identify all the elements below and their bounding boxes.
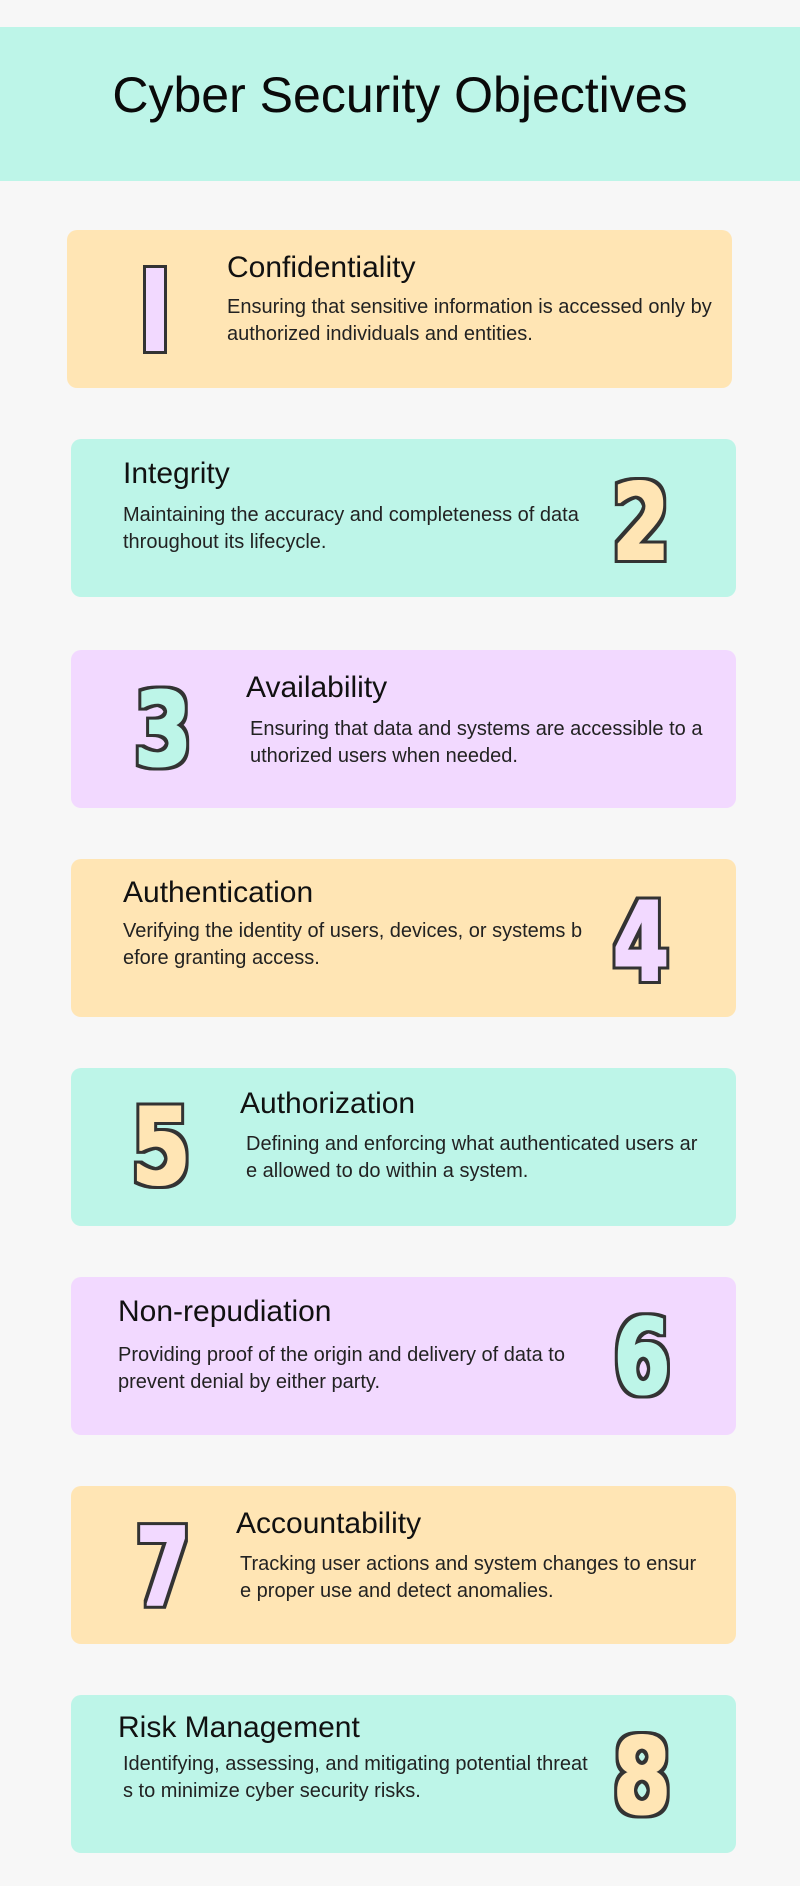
- number 1: 1: [112, 237, 198, 382]
- text: Availability description: Ensuring that data and systems are accessible to a: [250, 718, 702, 740]
- panel: card 5 background: [71, 1068, 736, 1226]
- text: Accountability description: Tracking user actions and system changes to ensur: [240, 1553, 696, 1575]
- heading: Confidentiality: Confidentiality: [227, 251, 415, 284]
- panel: card 6 background: [71, 1277, 736, 1435]
- text: Authorization description: Defining and enforcing what authenticated users ar: [246, 1133, 697, 1155]
- text: Confidentiality description: [227, 296, 712, 344]
- text: Confidentiality description: authorized individuals and entities.: [227, 322, 533, 344]
- text: Confidentiality description: Ensuring that sensitive information is accessed only by: [227, 296, 712, 318]
- text: Accountability description: [240, 1553, 696, 1602]
- text: Accountability description: e proper use and detect anomalies.: [240, 1580, 554, 1602]
- heading: Authorization: Authorization: [240, 1087, 415, 1120]
- panel: card 7 background: [71, 1486, 736, 1644]
- panel: card 1 background: [67, 230, 732, 388]
- panel: card 3 background: [71, 650, 736, 808]
- number 4: 4: [613, 879, 669, 1006]
- text: Non-repudiation description: [118, 1344, 565, 1392]
- number 6: 6: [614, 1298, 670, 1417]
- text: Risk Management description: [123, 1753, 588, 1802]
- text: Authorization description: [246, 1133, 698, 1182]
- number 3: 3: [134, 670, 192, 789]
- numerals 1 to 8: [134, 265, 670, 1818]
- number 5: 5: [131, 1086, 191, 1209]
- title: Cyber Security Objectives: [112, 67, 688, 123]
- heading: Authentication: Authentication: [123, 876, 313, 909]
- text: Authentication description: Verifying the identity of users, devices, or systems b: [123, 920, 582, 942]
- text: Authentication description: [123, 920, 582, 968]
- text: Integrity description: [123, 504, 579, 552]
- text: Non-repudiation description: Providing proof of the origin and delivery of data to: [118, 1344, 565, 1366]
- heading: Integrity: Integrity: [123, 457, 230, 490]
- panel: card 4 background: [71, 859, 736, 1017]
- text: Integrity description: throughout its lifecycle.: [123, 530, 326, 552]
- text: Risk Management description: s to minimize cyber security risks.: [123, 1780, 421, 1802]
- text: Availability description: uthorized users when needed.: [250, 744, 518, 766]
- header banner: [0, 27, 800, 181]
- text: Authentication description: efore granting access.: [123, 946, 320, 968]
- heading: Risk Management: Risk Management: [118, 1711, 360, 1744]
- panel: card 8 background: [71, 1695, 736, 1853]
- heading: Availability: Availability: [246, 671, 387, 704]
- heading: Accountability: Accountability: [236, 1507, 421, 1540]
- text: Integrity description: Maintaining the accuracy and completeness of data: [123, 504, 579, 526]
- text: Risk Management description: Identifying, assessing, and mitigating potential threat: [123, 1753, 588, 1775]
- text: Authorization description: e allowed to do within a system.: [246, 1160, 528, 1182]
- heading: Non-repudiation: Non-repudiation: [118, 1295, 331, 1328]
- number 7: 7: [136, 1506, 190, 1631]
- number 8: 8: [613, 1716, 671, 1839]
- panel: card 2 background: [71, 439, 736, 597]
- text: Availability description: [250, 718, 702, 766]
- text: Non-repudiation description: prevent denial by either party.: [118, 1370, 380, 1392]
- number 2: 2: [612, 462, 670, 585]
